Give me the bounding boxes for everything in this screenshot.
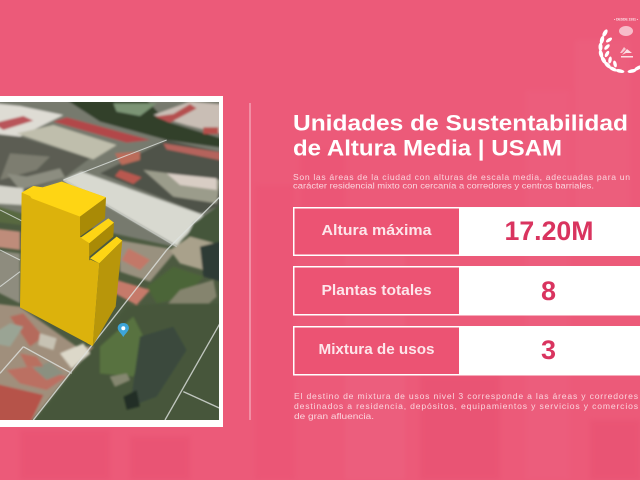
icon: yellow 3D building xyxy=(20,182,122,346)
aerial map xyxy=(0,97,227,423)
footnote text: de gran afluencia. xyxy=(294,411,374,421)
intro text xyxy=(293,172,630,190)
row: plantas totales: 8 xyxy=(541,276,556,306)
footnote text xyxy=(294,391,638,421)
lot lines xyxy=(0,140,220,420)
footnote text: destinados a residencia, depósitos, equipamientos y servicios y comercios xyxy=(294,401,638,411)
title xyxy=(293,110,628,160)
footnote text: El destino de mixtura de usos nivel 3 corresponde a las áreas y corredores xyxy=(294,391,638,401)
intro text: Son las áreas de la ciudad con alturas de escala media, adecuadas para un xyxy=(293,172,630,182)
map image panel xyxy=(0,96,227,427)
title: Unidades de Sustentabilidad xyxy=(293,110,628,136)
row: mixtura de usos xyxy=(294,326,640,376)
row: altura maxima xyxy=(294,207,640,256)
row: plantas totales: Plantas totales xyxy=(322,283,432,299)
icon: map pin xyxy=(118,323,129,337)
row: altura maxima: 17.20M xyxy=(504,216,594,246)
row: plantas totales xyxy=(294,266,640,316)
row: mixtura de usos: Mixtura de usos xyxy=(318,342,434,358)
row: mixtura de usos: 3 xyxy=(541,335,556,365)
logo xyxy=(598,18,640,74)
intro text: carácter residencial mixto con cercanía a corredores y centros barriales. xyxy=(293,180,594,190)
vertical divider xyxy=(250,103,251,420)
logo: • DESDE 1931 • xyxy=(614,18,639,22)
row: altura maxima: Altura máxima xyxy=(322,223,433,239)
title: de Altura Media | USAM xyxy=(293,136,562,160)
